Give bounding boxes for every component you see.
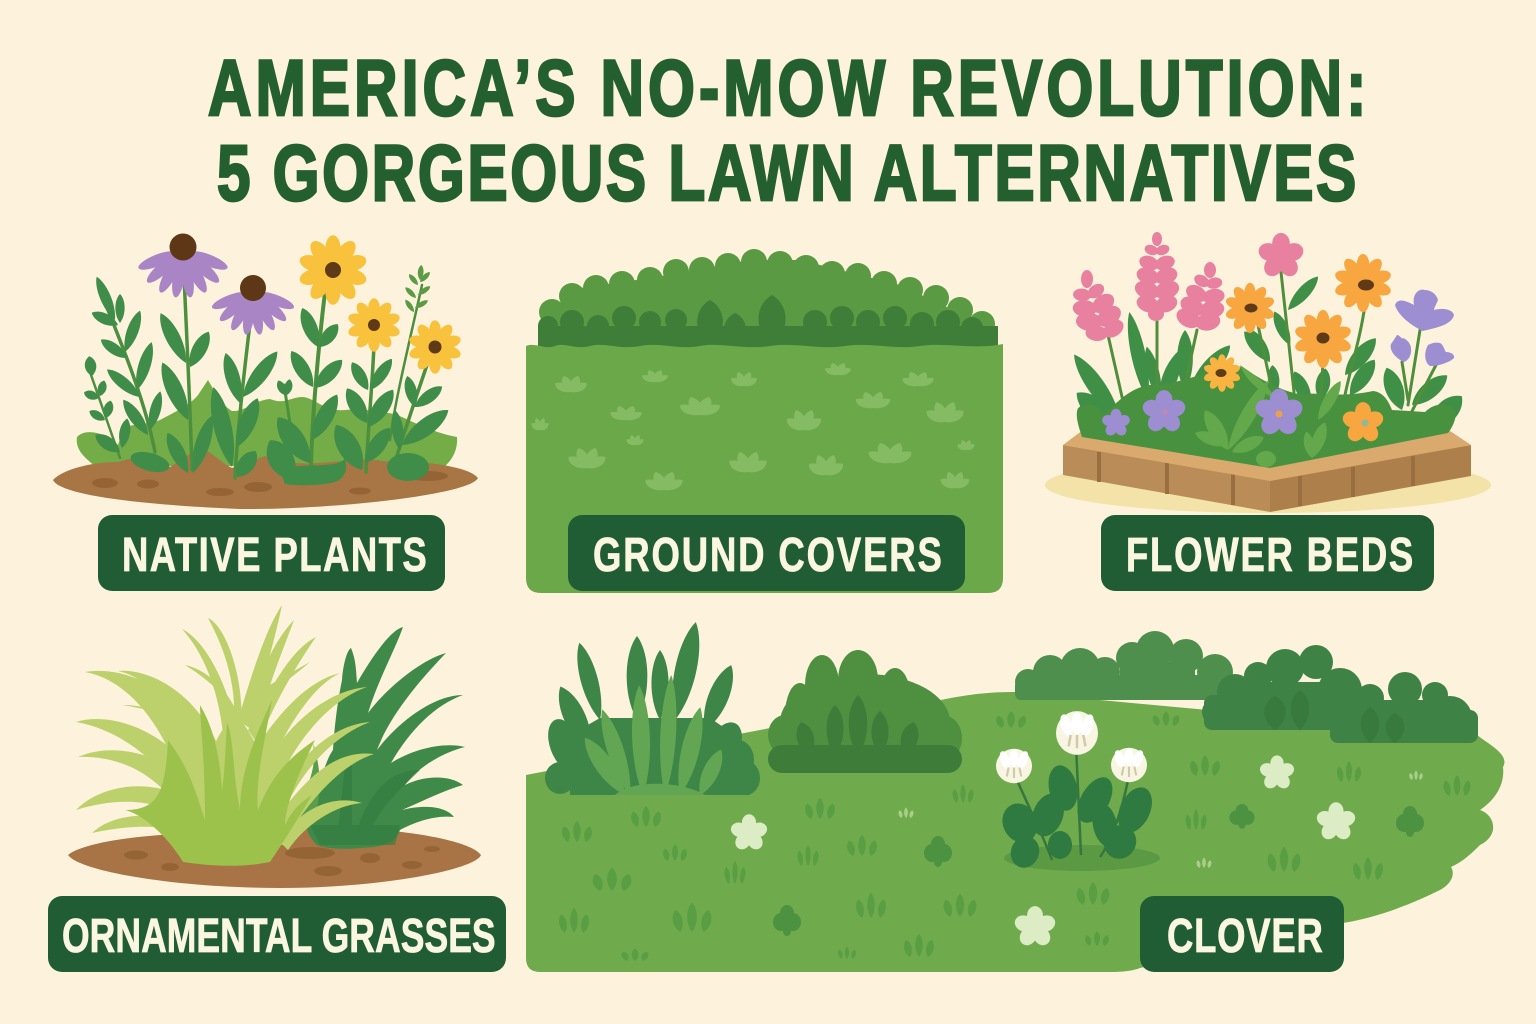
middle bush shadow	[768, 695, 962, 773]
lawn panel	[526, 344, 1003, 593]
lawn tufts	[530, 362, 976, 493]
hedge front layer	[538, 295, 998, 351]
label: ornamental grasses	[48, 896, 506, 972]
label: clover	[1140, 896, 1344, 972]
panel: native plants	[53, 234, 478, 509]
panel: ornamental grasses	[68, 605, 481, 888]
stems	[90, 255, 427, 478]
brick faces	[1063, 445, 1270, 512]
lawn	[526, 692, 1504, 972]
label: ornamental grasses: ORNAMENTAL GRASSES	[62, 909, 496, 962]
pale blades	[76, 605, 374, 850]
soil mound	[53, 447, 478, 509]
coneflowers	[136, 248, 296, 335]
left bush	[542, 620, 760, 795]
grass tufts	[557, 711, 1472, 962]
sand base	[1045, 457, 1491, 513]
orange flowers	[1203, 254, 1393, 445]
label: ground covers	[568, 515, 965, 591]
right hedges	[1202, 645, 1478, 743]
soil	[68, 827, 481, 888]
white clover blossoms	[729, 755, 1357, 949]
panel: flower beds	[1045, 232, 1491, 513]
mid green core	[125, 700, 315, 866]
planting bed foliage	[1077, 364, 1456, 468]
label: native plants	[98, 515, 445, 591]
stems	[1108, 272, 1436, 430]
middle bush	[768, 650, 962, 770]
title: 5 GORGEOUS LAWN ALTERNATIVES	[217, 128, 1356, 217]
pale sprouts	[898, 771, 1423, 868]
yellow flowers	[298, 235, 462, 374]
clover clumps	[773, 804, 1424, 936]
back hedge	[1015, 631, 1240, 700]
sprig	[403, 265, 432, 313]
title	[208, 43, 1366, 217]
panel: clover lawn	[526, 620, 1504, 972]
tall background leaves	[1067, 273, 1469, 436]
purple flowers	[1101, 290, 1454, 438]
brick rim	[1063, 430, 1471, 481]
title: AMERICA’S NO-MOW REVOLUTION:	[208, 43, 1366, 132]
label: ground covers: GROUND COVERS	[593, 528, 942, 582]
dark grass clump	[307, 627, 465, 849]
lighter leaves	[1193, 365, 1345, 467]
pink spikes	[1068, 232, 1306, 347]
label: native plants: NATIVE PLANTS	[122, 528, 427, 582]
hedge back layer	[538, 249, 998, 345]
label: flower beds	[1101, 515, 1434, 591]
label: flower beds: FLOWER BEDS	[1126, 528, 1413, 582]
leaves	[83, 275, 453, 486]
background foliage	[77, 380, 457, 466]
panel: ground covers	[526, 249, 1003, 593]
label: clover: CLOVER	[1167, 909, 1323, 963]
clover plant	[1004, 845, 1160, 871]
